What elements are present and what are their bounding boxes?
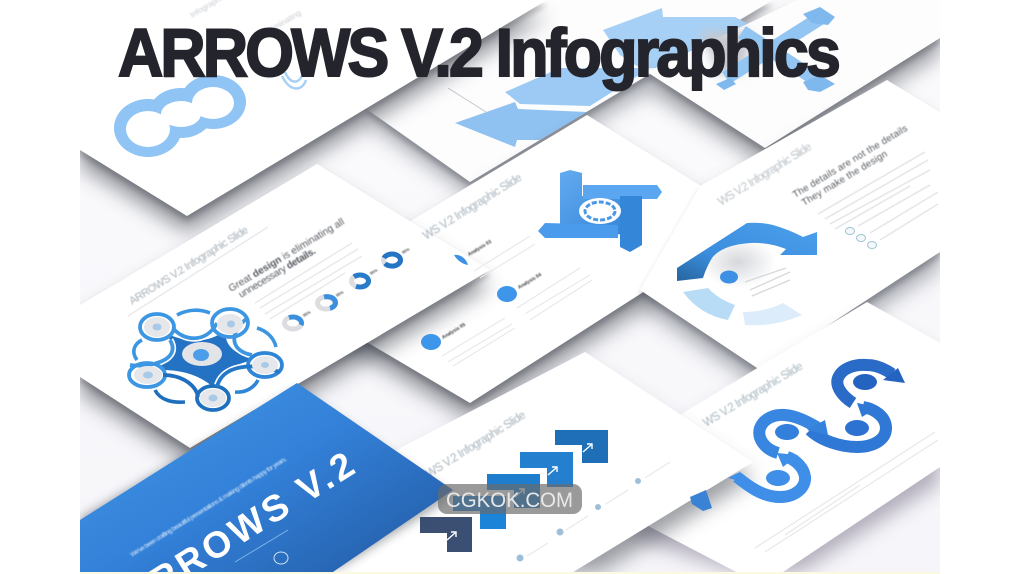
panel: top right slide [647,0,940,164]
text: headline: Great design is eliminating all [227,217,347,295]
watermark [438,484,582,514]
text: slide heading: WS V.2 Infographic Slide [701,361,805,430]
icon: pinwheel arrows [538,170,662,252]
text: donut labels: 95% [335,289,345,298]
text: feature lines [527,462,670,556]
text: donut labels: 95% [369,267,379,276]
text: feature lines [442,236,592,366]
panel: slide with circular arrow [640,80,940,375]
decorative bottom edge [80,572,940,574]
icon: feature crescent [454,255,468,265]
chart: palest arc segment [743,303,802,325]
panel: slide with S arrow [630,302,940,572]
chart: donut charts [284,254,400,329]
icon: partial blue arrow [690,490,712,511]
text: slide heading: WS V.2 Infographic Slide [421,172,524,243]
panel: top left slide [80,0,547,232]
text: feature labels: Analysis 03 [467,239,493,258]
text: feature labels: Analysis 05 [441,322,467,341]
text: faint slide heading: is eliminating [258,8,303,40]
text: donut labels: 95% [401,246,411,255]
icon: S arrow heads [728,368,905,483]
panel: slide with donuts and network [80,164,490,464]
text: feature labels: Analysis 04 [517,272,543,291]
icon: crossed arrows [700,7,835,92]
icon: centre dot [720,270,738,284]
chart: big circular arrow [677,223,817,281]
text: slide heading: ARROWS V.2 Infographic Slide [127,224,251,308]
text: cover tagline: We've been crafting beautiful presentations & making clients happy for years. [129,456,288,559]
icon: feature icons [516,478,641,562]
text: body lines [255,243,362,319]
icon: cover circle arrow [274,552,288,564]
shadow of arrow slide [636,252,940,382]
chart: light arc segment [683,288,735,320]
text: feature labels [441,239,543,341]
icon: S arrow circles [766,374,877,486]
text: centre lines [745,268,790,296]
chart: arrow network [129,309,282,410]
icon: check circles [846,228,876,248]
text: donut labels: 95% [302,309,312,318]
icon: chained rings [114,75,246,157]
text: body lines [755,432,938,552]
chart: S-shaped arrow path [737,365,892,497]
watermark: CGKOK.COM [446,489,573,512]
chart: light blue double arrows [448,8,770,147]
panel: slide with pinwheel [348,115,702,422]
text: donut labels [302,246,411,318]
icon: feature circle [421,334,441,350]
icon: feature circle [497,286,517,302]
text: headline: unnecessary details. [237,246,318,301]
group: pinwheel slide content [421,170,662,366]
chart: stair step arrows [420,430,608,552]
group: S arrow slide content [690,361,938,552]
panel: slide with stair arrows [300,352,753,574]
text: body lines [818,152,938,240]
text: faint slide heading [190,0,302,28]
panel: blue cover slide [80,383,453,574]
text: slide heading: WS V.2 Infographic Slide [716,141,814,209]
text: slide heading: WS V.2 Infographic Slide [424,409,528,481]
icon: small arc [282,72,306,89]
text: headline: They make the design [800,149,890,209]
title: ARROWS V.2 Infographics [118,15,839,91]
icon: outer cycle arrows [134,310,276,402]
chart: centre shading [708,243,768,282]
text: headline: The details are not the details [791,123,910,201]
panel: top middle slide [365,0,775,196]
